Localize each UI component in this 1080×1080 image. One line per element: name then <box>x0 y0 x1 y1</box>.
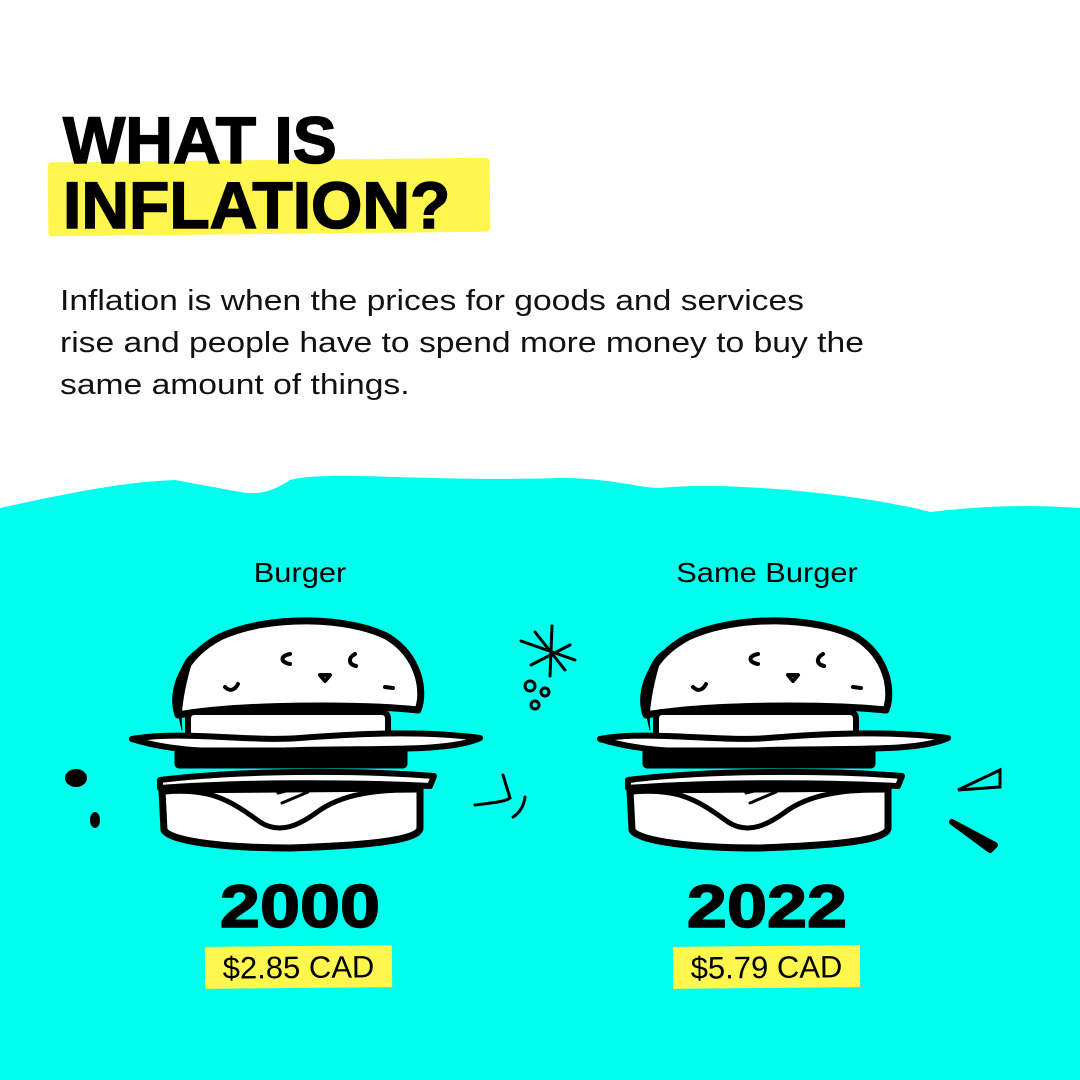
year 2022: 2022 <box>687 873 847 940</box>
burger 2000 <box>132 621 480 848</box>
body text: Inflation is when the prices for goods and services <box>60 285 804 317</box>
title <box>62 103 450 242</box>
price 2022 <box>673 945 860 989</box>
body text: rise and people have to spend more money to buy the <box>60 327 864 359</box>
price 2022: $5.79 CAD <box>691 949 842 986</box>
title highlight <box>48 158 490 236</box>
cyan wave background <box>0 476 1080 1080</box>
label: Burger: Burger <box>254 557 346 588</box>
doodles <box>475 626 1000 817</box>
title: INFLATION? <box>63 168 450 242</box>
body text: same amount of things. <box>60 369 410 401</box>
body text <box>60 285 864 401</box>
year 2000: 2000 <box>220 873 380 940</box>
price 2000 <box>205 945 392 989</box>
title: WHAT IS <box>63 103 337 177</box>
label: Same Burger: Same Burger <box>676 557 858 588</box>
burger 2022 <box>600 621 948 848</box>
price 2000: $2.85 CAD <box>223 949 374 986</box>
